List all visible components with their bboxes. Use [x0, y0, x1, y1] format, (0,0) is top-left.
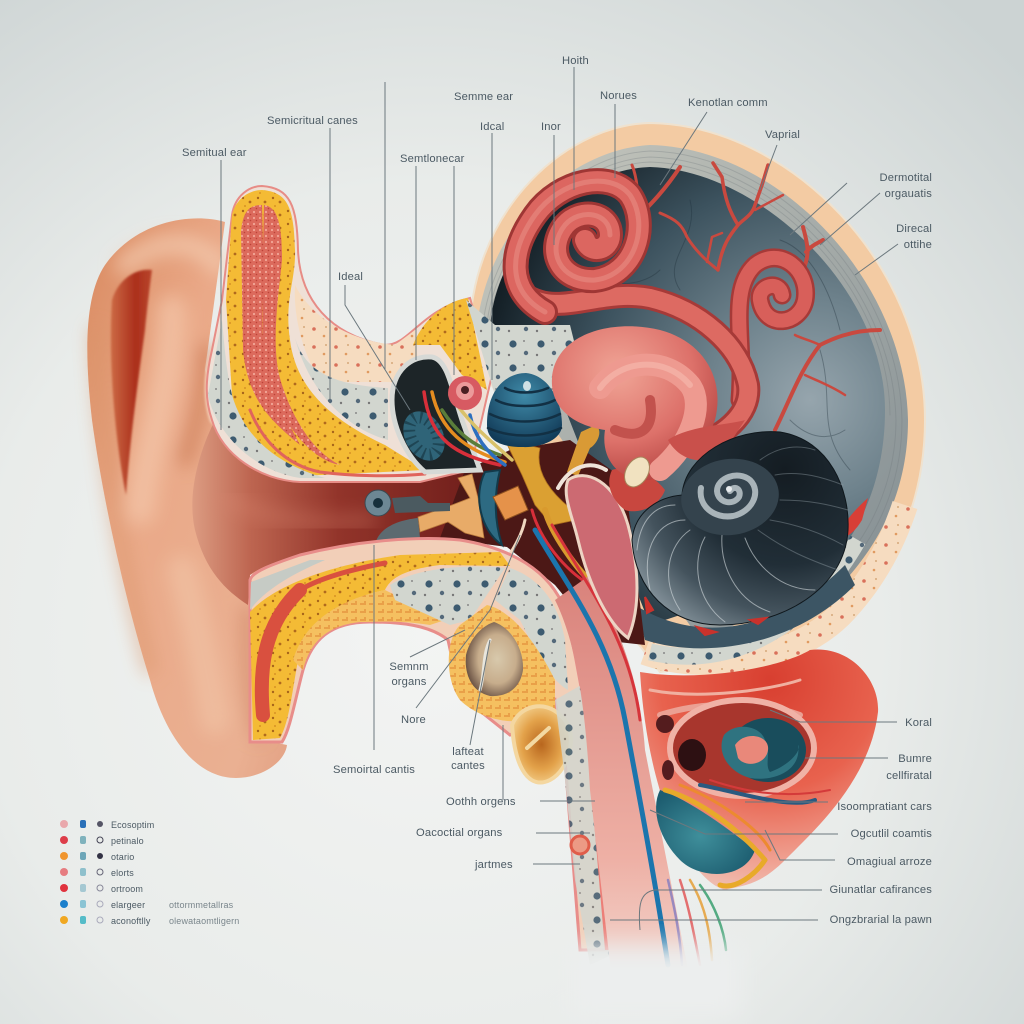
labels: Bumre	[898, 753, 932, 765]
labels: Ongzbrarial la pawn	[830, 914, 932, 926]
labels: ottihe	[904, 239, 932, 251]
labels: Norues	[600, 90, 637, 102]
labels: Giunatlar cafirances	[830, 884, 932, 896]
panel: middle ear central structures	[365, 357, 600, 590]
tube: right spiral	[739, 258, 806, 400]
labels: Idcal	[480, 121, 504, 133]
tube: top spiral loop	[516, 181, 639, 312]
panel: dark middle ear cavity	[440, 440, 645, 645]
labels: lafteat	[452, 746, 485, 758]
small ossicle arm	[567, 425, 599, 476]
legend	[60, 820, 239, 926]
labels: Koral	[905, 717, 932, 729]
icon: teal crescent	[722, 727, 799, 779]
labels: Vaprial	[765, 129, 800, 141]
labels: Semtlonecar	[400, 153, 465, 165]
labels: Omagiual arroze	[847, 856, 932, 868]
panel: lower tissue section	[250, 539, 622, 965]
labels: Oacoctial organs	[416, 827, 503, 839]
icon: small ear cup	[512, 706, 571, 783]
tragus fold	[204, 340, 228, 438]
panel: outer ear	[87, 218, 485, 778]
nerve strands	[668, 880, 726, 965]
icon: teal fan	[656, 790, 755, 874]
labels: Semnm	[389, 661, 429, 673]
legend: elargeer	[111, 900, 145, 910]
ear opening: red helix shadow	[111, 270, 152, 495]
panel: pink tongue tissue	[558, 465, 637, 638]
panel: long muscle band	[535, 525, 690, 980]
labels: Inor	[541, 121, 561, 133]
legend: ottormmetallras	[169, 900, 234, 910]
labels: organs	[391, 676, 427, 688]
icon: blue beehive	[487, 373, 562, 447]
legend: petinalo	[111, 836, 144, 846]
vessels	[632, 163, 880, 430]
panel: upper tissue section	[207, 186, 575, 482]
labels: Ogcutlil coamtis	[851, 828, 932, 840]
labels: Oothh orgens	[446, 796, 516, 808]
tympanic opening	[392, 357, 480, 472]
spine column	[555, 680, 622, 965]
leader lines	[221, 67, 898, 930]
icon: blue coil	[395, 404, 453, 468]
orange shell border	[449, 605, 555, 721]
ossicle chain	[418, 474, 484, 538]
legend: Ecosoptim	[111, 820, 154, 830]
labels: Nore	[401, 714, 426, 726]
oval chamber	[670, 700, 814, 796]
panel: lower right muscle	[640, 650, 878, 965]
icon: dark spiral shell	[632, 432, 848, 635]
icon: ossicle blocks	[493, 486, 528, 520]
labels: cantes	[451, 760, 485, 772]
icon: grey coil	[375, 518, 420, 552]
icon: small pink ring	[448, 376, 482, 410]
band: spotted lower wall	[645, 505, 905, 662]
legend: otario	[111, 852, 134, 862]
legend: elorts	[111, 868, 134, 878]
ear highlights	[96, 244, 258, 735]
labels: Semitual ear	[182, 147, 247, 159]
labels: Dermotital	[880, 172, 932, 184]
labels: Ideal	[338, 271, 363, 283]
labels: orgauatis	[885, 188, 932, 200]
labels: jartmes	[474, 859, 513, 871]
red spots under shell	[645, 597, 766, 635]
icon: round eye knob	[365, 490, 450, 516]
labels: cellfiratal	[886, 770, 932, 782]
legend: aconoftlly	[111, 916, 151, 926]
fade: bottom of structures	[570, 945, 740, 1015]
wires below	[490, 510, 600, 590]
labels: Kenotlan comm	[688, 97, 768, 109]
panel: cranial chamber	[470, 123, 925, 672]
legend: olewataomtligern	[169, 916, 239, 926]
nerve wires	[424, 392, 512, 465]
labels: Direcal	[896, 223, 932, 235]
labels: Semme ear	[454, 91, 513, 103]
labels	[182, 55, 932, 926]
tube: central	[525, 295, 748, 445]
organ: large pink fold	[552, 326, 745, 511]
labels: Isoompratiant cars	[837, 801, 932, 813]
cave veins	[560, 200, 850, 470]
labels: Semicritual canes	[267, 115, 358, 127]
legend: ortroom	[111, 884, 143, 894]
ear canal	[192, 420, 485, 605]
golden stem	[505, 440, 576, 525]
icon: blue ring	[479, 470, 502, 545]
icon: shell oval	[466, 622, 523, 696]
labels: Hoith	[562, 55, 589, 67]
panel: vessels and tubes	[516, 163, 880, 511]
labels: Semoirtal cantis	[333, 764, 415, 776]
